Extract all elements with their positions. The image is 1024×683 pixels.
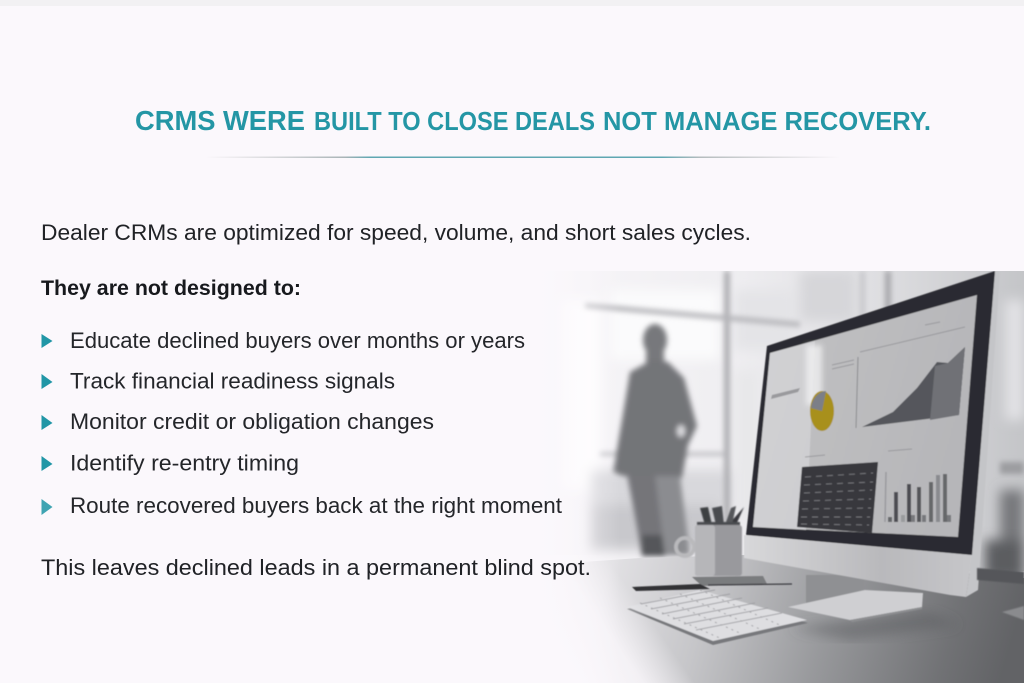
title: NOT MANAGE RECOVERY. [603,106,931,136]
left edge fades [540,302,685,683]
pie chart [810,391,834,431]
monitor [744,271,1000,597]
bullet 4: Identify re-entry timing [70,450,299,476]
title: CRMS WERE [135,105,305,136]
data table [797,462,878,533]
bullet list [42,328,562,518]
bullet 5: Route recovered buyers back at the right moment [70,493,562,518]
monitor stand [788,575,960,640]
notebook, phone and pen [632,576,792,591]
keyboard [627,590,808,645]
intro sentence: Dealer CRMs are optimized for speed, volume, and short sales cycles. [41,220,751,245]
blurred office background [540,271,1024,580]
objects at right edge of desk [977,568,1024,620]
bullet 2: Track financial readiness signals [70,368,395,394]
title [135,105,931,136]
coffee mug with pencils [676,506,744,576]
area chart [856,347,965,428]
bullet 1: Educate declined buyers over months or years [70,328,525,353]
title: BUILT TO CLOSE DEALS [314,108,595,136]
closing sentence: This leaves declined leads in a permanent blind spot. [41,555,591,580]
person silhouette [613,324,697,556]
subheading: They are not designed to: [41,277,301,300]
photo: businessperson at window with desktop monitor [535,271,1024,683]
bullet 3: Monitor credit or obligation changes [70,409,434,434]
screen [753,295,977,537]
desk surface [540,555,1024,683]
bar chart [885,472,951,522]
